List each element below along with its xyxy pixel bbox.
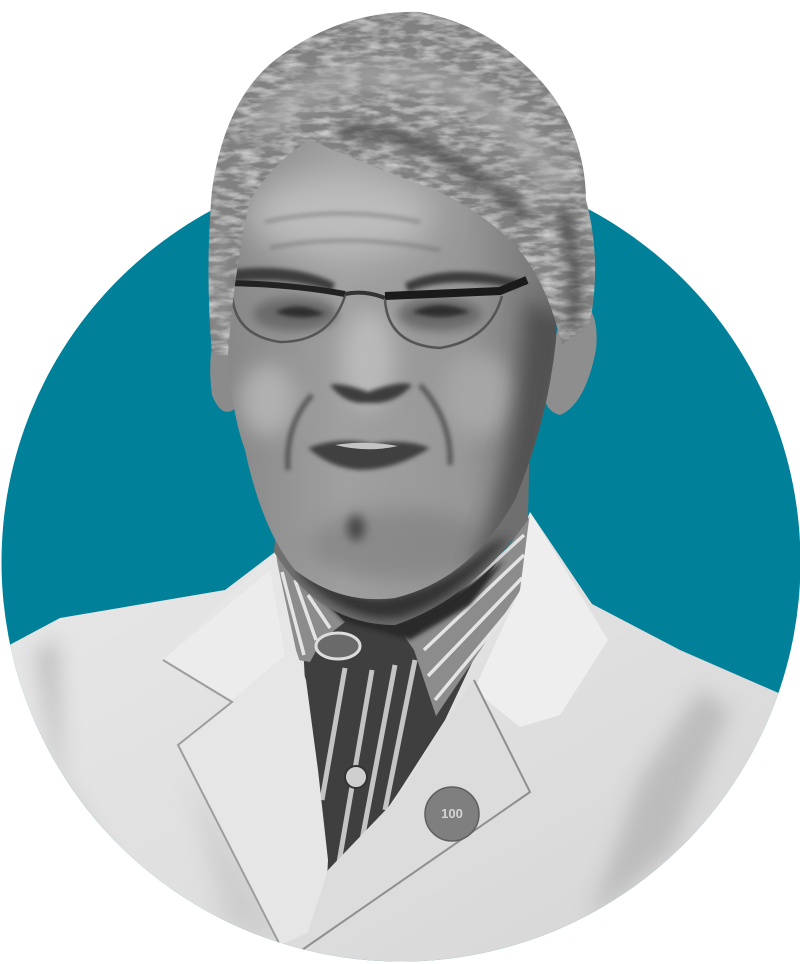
right side hair shading: [562, 215, 575, 320]
shirt stripes: [322, 660, 415, 880]
neck: [274, 420, 530, 625]
left lapel edge: [163, 660, 280, 945]
eye sockets: [253, 297, 337, 331]
right face shadow: [466, 297, 556, 561]
eyebrows: [232, 268, 335, 291]
coat body: [0, 512, 800, 964]
face: [230, 140, 556, 600]
hair: [208, 12, 595, 355]
top frame right: [385, 280, 527, 296]
nose highlight: [342, 310, 394, 410]
right lapel edge: [302, 680, 530, 950]
collar button: [316, 633, 360, 659]
left shirt collar: [276, 552, 345, 662]
glasses: [226, 280, 527, 348]
right ear: [544, 300, 597, 415]
chin dimple: [347, 515, 365, 541]
upper hair highlight: [262, 75, 555, 185]
left cheek highlight: [240, 364, 296, 436]
left lens rim: [232, 290, 345, 342]
shirt collar shadow: [318, 560, 505, 640]
coat shading: [35, 640, 730, 945]
right cheek: [442, 353, 514, 437]
right collar stripes: [420, 535, 524, 700]
badge: [425, 787, 479, 841]
badge: 100: [441, 806, 463, 821]
eyes: [275, 306, 325, 318]
hair shading: [221, 75, 575, 335]
right coat lower lapel: [308, 686, 480, 932]
right shirt collar: [400, 516, 530, 716]
shirt button: [345, 766, 367, 788]
mouth: [308, 441, 430, 470]
neck shadow: [300, 535, 510, 619]
forehead wrinkles: [265, 214, 440, 250]
left ear: [210, 320, 240, 412]
nasolabial folds: [288, 395, 312, 470]
left coat lapel: [203, 552, 328, 944]
lower hair shadow: [345, 130, 525, 215]
shirt placket: [304, 554, 500, 872]
lower face shading: [310, 510, 490, 580]
forehead highlight: [245, 173, 435, 257]
left side hair shading: [221, 220, 222, 335]
right coat upper lapel: [474, 512, 608, 727]
right lens rim: [385, 296, 502, 348]
lab coat and shirt: [0, 512, 800, 964]
face base: [230, 140, 556, 600]
left collar stripes: [282, 572, 330, 655]
top frame left: [226, 283, 345, 294]
nose underside: [330, 384, 412, 403]
bridge: [345, 293, 385, 298]
